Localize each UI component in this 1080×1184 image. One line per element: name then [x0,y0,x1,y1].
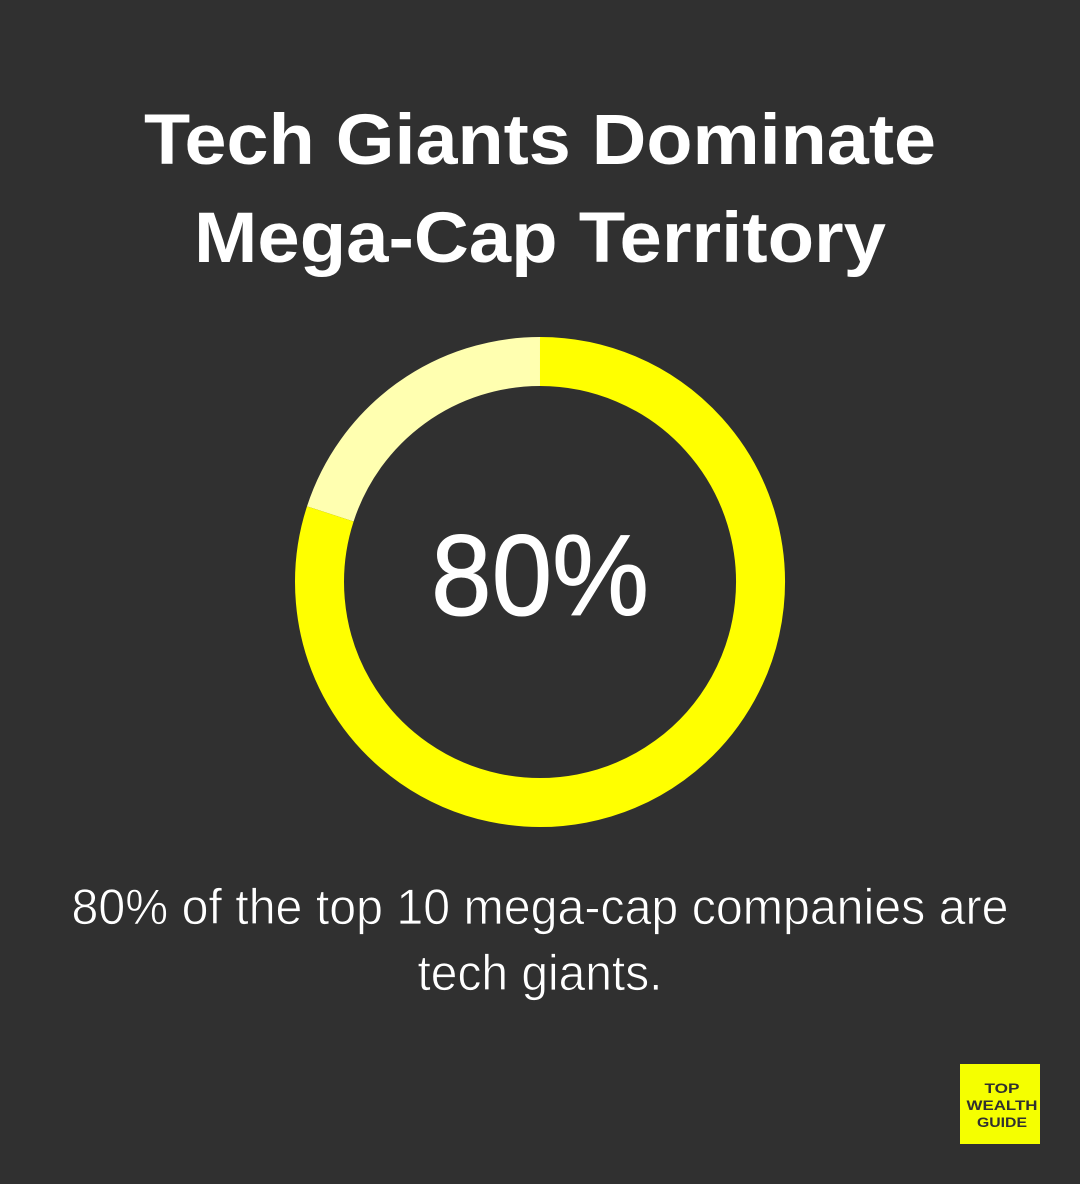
caption: tech giants. [418,945,662,1001]
logo badge: GUIDE [977,1115,1027,1130]
title [144,101,936,278]
caption: 80% of the top 10 mega-cap companies are [72,879,1008,935]
logo badge [960,1064,1040,1144]
logo badge: WEALTH [966,1098,1038,1113]
caption [72,879,1008,1001]
center value: 80% [431,512,649,640]
ring segment: highlighted 80% [320,362,761,802]
logo badge: TOP [984,1081,1020,1096]
title: Tech Giants Dominate [144,101,936,180]
ring segment: remaining 20% [330,362,540,514]
donut chart: 80% [320,362,761,802]
title: Mega-Cap Territory [194,199,887,278]
